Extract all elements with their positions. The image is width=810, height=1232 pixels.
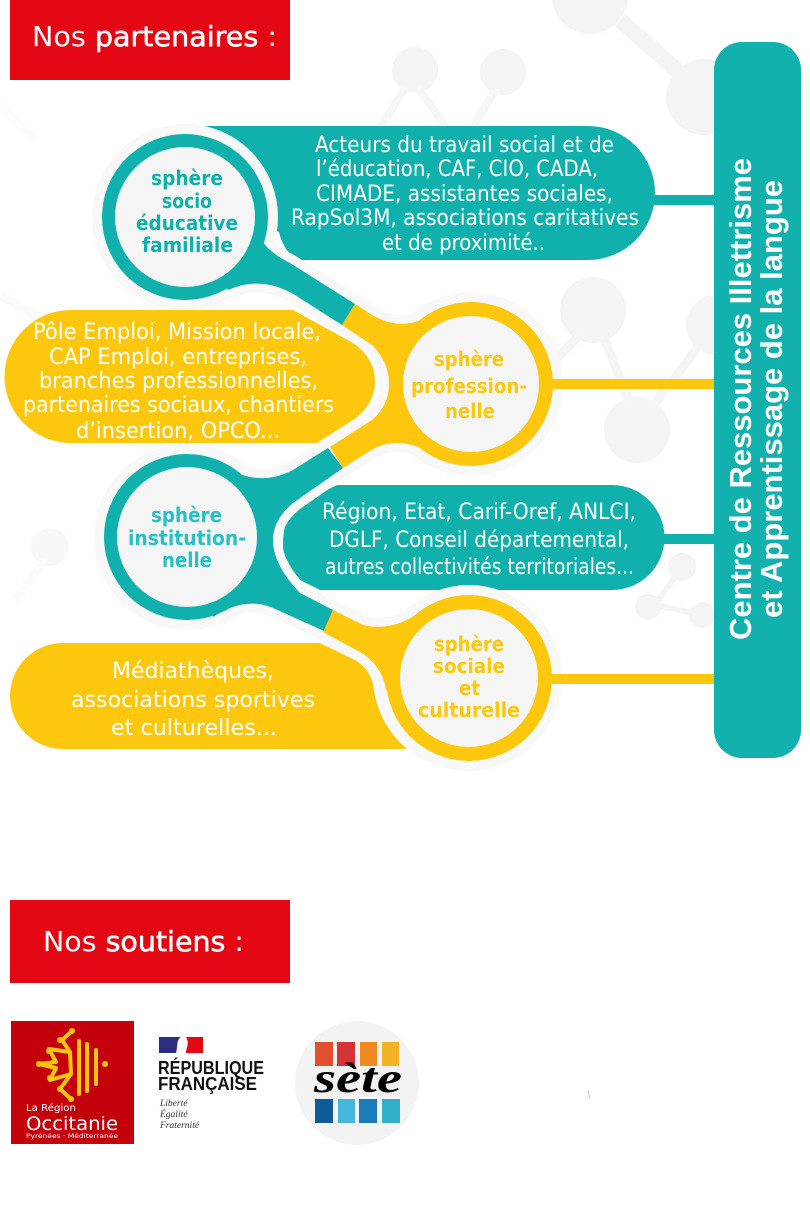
panel: pill institutionnelle [283,485,665,590]
panel: Centre de Ressources: Centre de Ressources Illettrisme [723,158,758,640]
sphere: sociale et culturelle: sphère [434,632,504,656]
logo: Sete [295,1021,419,1145]
text: institutional partners: Région, Etat, Carif-Oref, ANLCI, [322,499,636,525]
heading: Nos partenaires [10,0,290,80]
panel: pill professionnelle [4,310,375,443]
panel: Centre de Ressources [714,42,801,758]
heading: Nos soutiens: Nos soutiens : [43,925,244,958]
text: institutional partners: DGLF, Conseil départemental, [329,527,629,553]
text: institutional partners: autres collectivités territoriales... [325,554,634,580]
logo: Region Occitanie: Occitanie [26,1113,118,1135]
sphere: socio educative [115,147,255,287]
text: social and cultural partners: associations sportives [71,687,315,713]
sphere: socio educative: sphère [151,166,223,190]
text: professional partners: branches professionnelles, [39,368,318,394]
small mark [588,1091,590,1098]
sphere: sociale et culturelle: sociale [433,654,505,678]
sphere: sociale et culturelle: et [459,676,480,700]
sphere: professionnelle: profession- [411,374,527,398]
logo: Sete: sète [313,1056,402,1102]
text: social and cultural partners: Médiathèques, [112,658,274,684]
logo: Republique Francaise: Égalité [159,1108,188,1120]
text: socio-educative partners: et de proximité.. [382,230,545,256]
background molecules [0,0,746,628]
sphere: socio educative: éducative [136,211,238,235]
text: professional partners: CAP Emploi, entreprises, [49,344,307,370]
text: socio-educative partners: CIMADE, assistantes sociales, [316,181,613,207]
teal shapes [102,134,355,631]
panel: pill sociale [10,643,407,749]
logo: Republique Francaise: FRANÇAISE [158,1074,257,1094]
text: social and cultural partners [71,658,315,741]
sphere: professionnelle [403,316,539,452]
sphere: professionnelle: nelle [445,399,495,423]
logo: Region Occitanie [11,1021,134,1144]
sphere: sociale et culturelle [400,609,538,747]
text: professional partners: Pôle Emploi, Mission locale, [33,319,321,345]
text: socio-educative partners: l’éducation, CAF, CIO, CADA, [316,156,598,182]
logo: Republique Francaise [158,1037,264,1131]
text: professional partners [23,319,334,444]
sphere: institutionnelle: sphère [151,503,222,527]
text: socio-educative partners [291,132,639,256]
sphere: institutionnelle [117,467,257,607]
connector lines [545,195,720,684]
text: socio-educative partners: Acteurs du travail social et de [315,132,614,158]
sphere: institutionnelle: institution- [128,526,246,550]
panel: Centre de Ressources: et Apprentissage de la langue [754,180,789,618]
text: socio-educative partners: RapSol3M, associations caritatives [291,205,639,231]
sphere: socio educative: familiale [142,233,233,257]
panel: pill socio-educative [200,126,655,260]
text: professional partners: d’insertion, OPCO... [76,418,280,444]
text: social and cultural partners: et culturelles... [111,715,277,741]
halos [101,133,554,762]
logo: Region Occitanie: La Région [26,1102,76,1114]
logo: Republique Francaise: Fraternité [159,1121,200,1131]
text: institutional partners [322,499,636,580]
sphere: institutionnelle: nelle [162,548,212,572]
heading: Nos partenaires: Nos partenaires : [32,20,277,53]
logo: Republique Francaise: Liberté [159,1099,188,1109]
yellow shapes [323,302,553,761]
heading: Nos soutiens [10,900,290,983]
logo: Region Occitanie: Pyrénées · Méditerranée [26,1133,118,1140]
logo: Republique Francaise: RÉPUBLIQUE [158,1057,264,1078]
sphere: professionnelle: sphère [434,347,504,371]
text: professional partners: partenaires sociaux, chantiers [23,392,334,418]
sphere: sociale et culturelle: culturelle [418,698,520,722]
sphere: socio educative: socio [162,189,212,213]
